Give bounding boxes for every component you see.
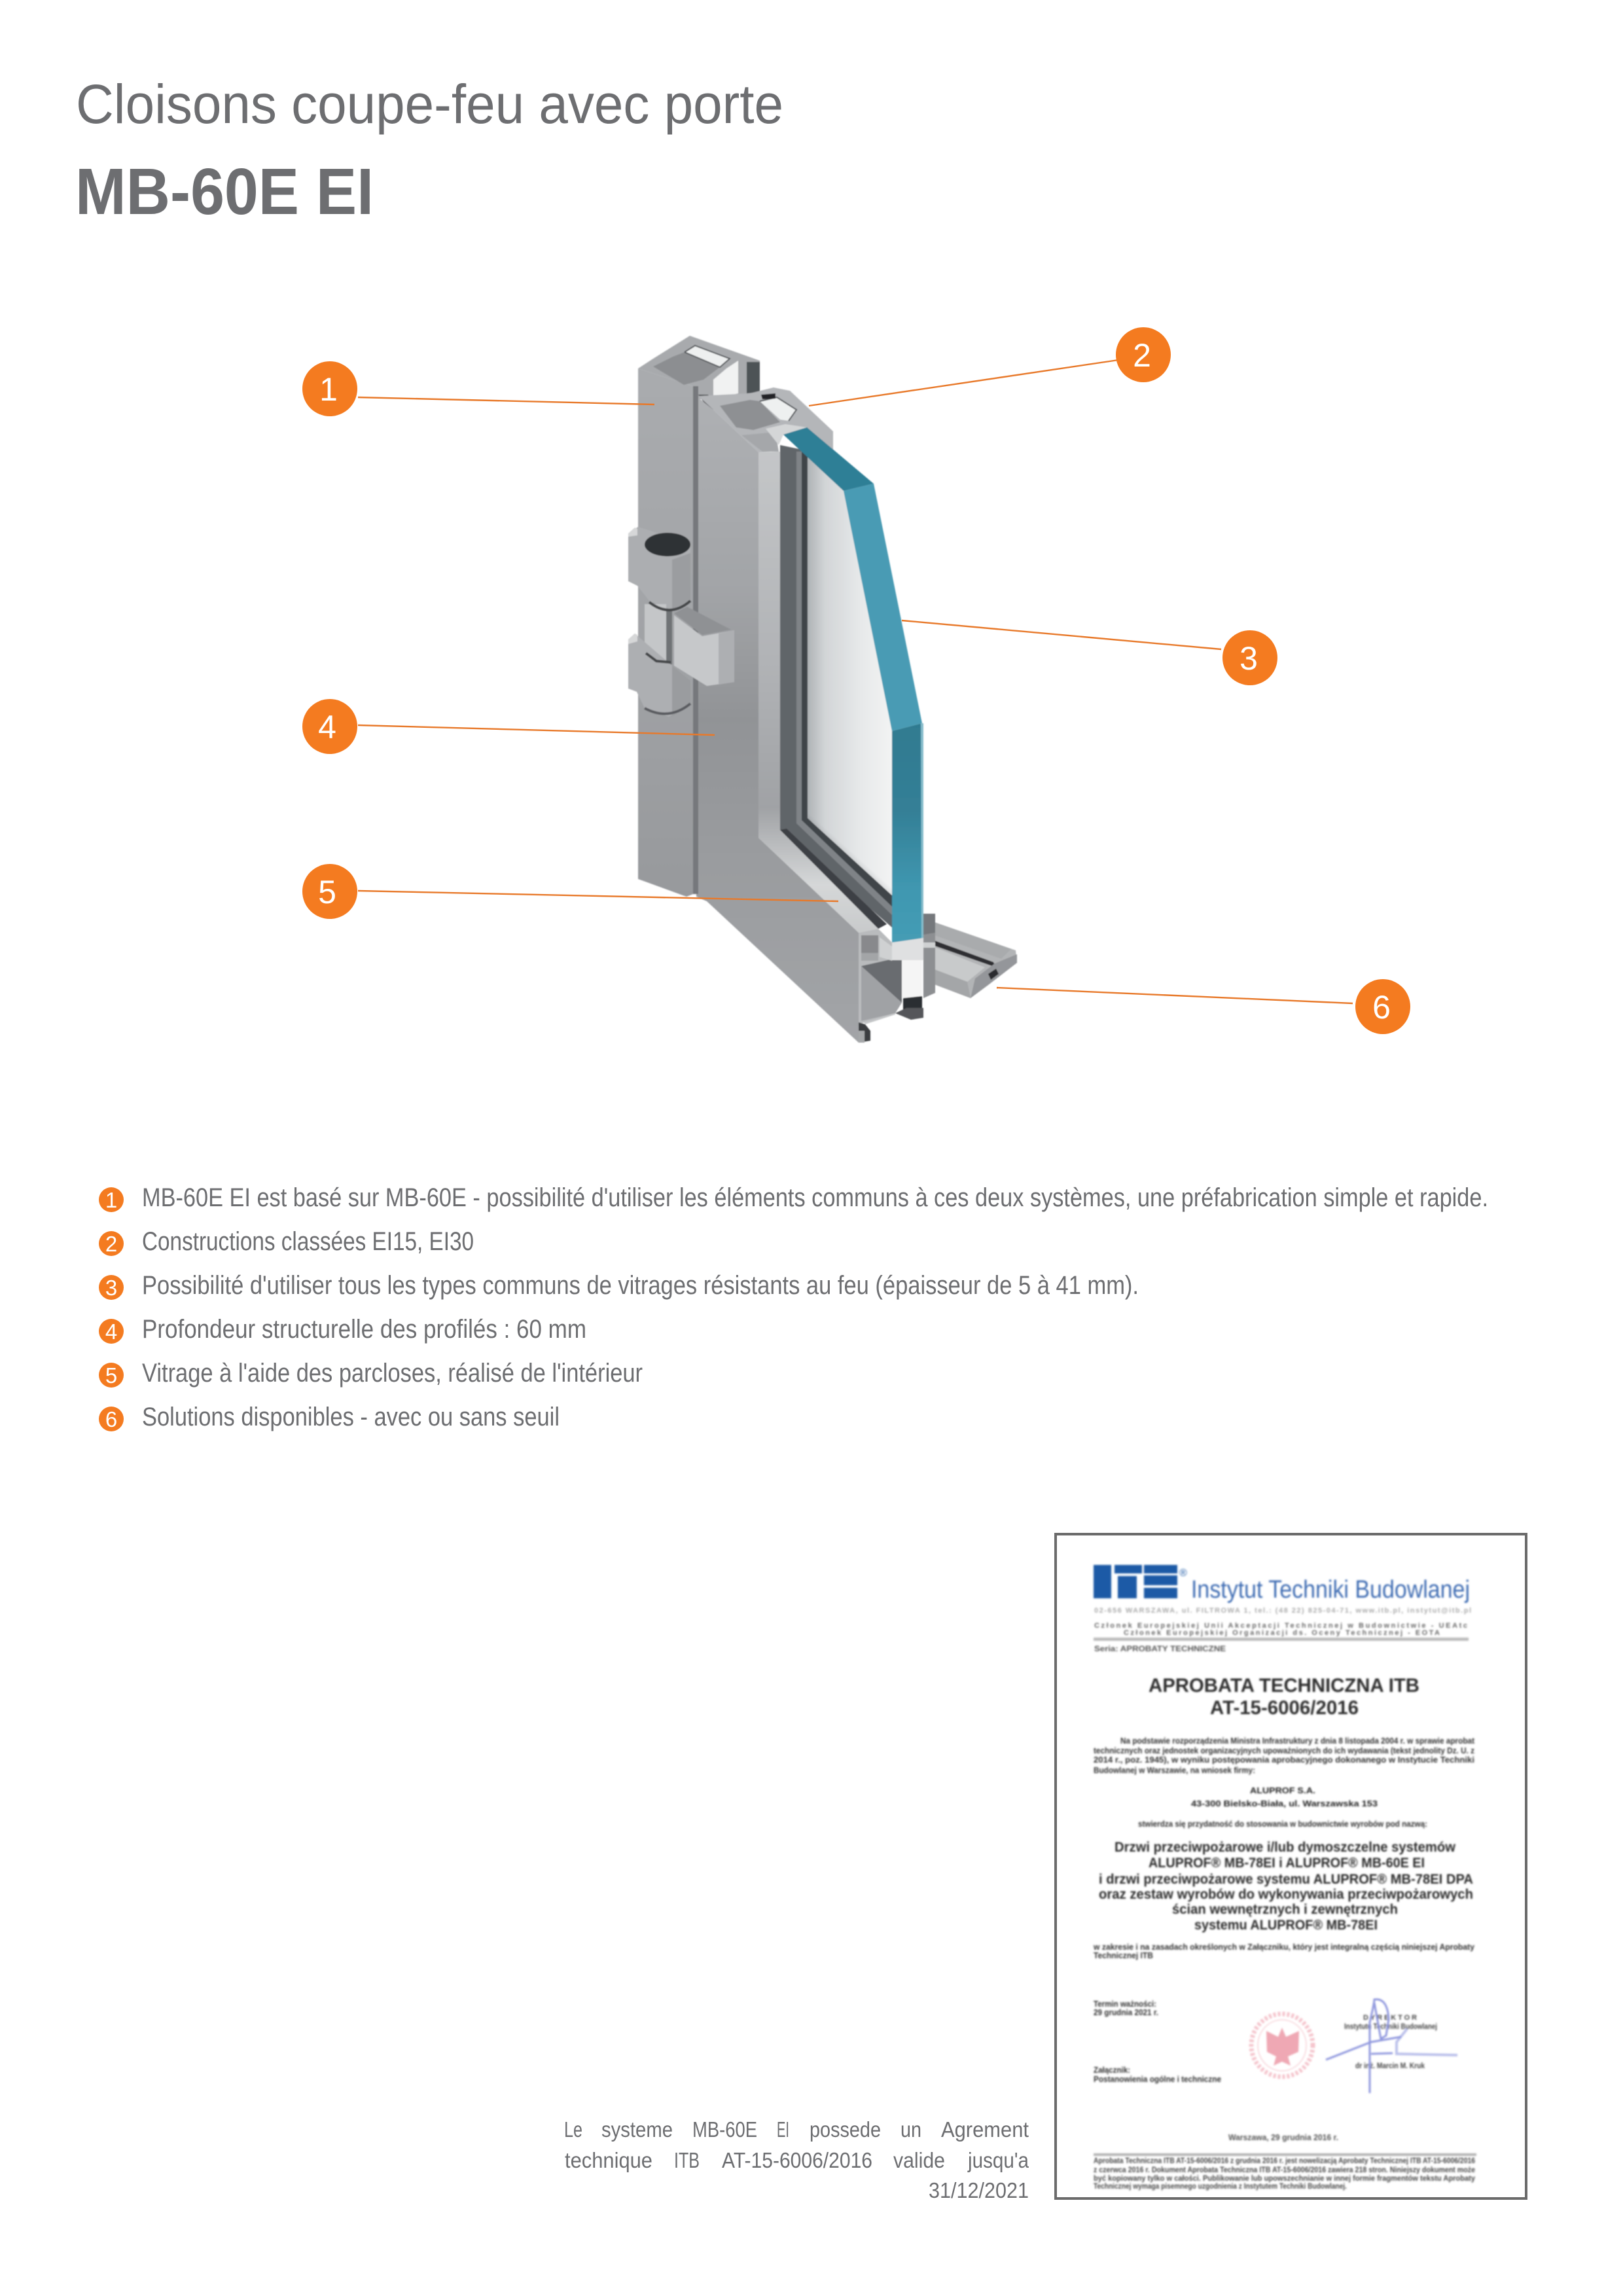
item 5: Vitrage à l'aide des parcloses, réalisé de l'intérieur <box>142 1359 643 1388</box>
validity and annex: Termin ważności: <box>1094 2000 1156 2009</box>
product designation: Drzwi przeciwpożarowe i/lub dymoszczelne systemów <box>1115 1840 1456 1855</box>
caption: technical approval note: jusqu'a <box>967 2148 1029 2172</box>
scope paragraph: Technicznej ITB <box>1094 1951 1153 1960</box>
validity and annex: 29 grudnia 2021 r. <box>1094 2008 1158 2017</box>
approval title <box>1149 1675 1419 1719</box>
jamb outer face <box>638 368 693 897</box>
validity and annex: Załącznik: <box>1094 2066 1130 2075</box>
hinge <box>628 527 734 717</box>
sill end section <box>859 914 935 1043</box>
product designation <box>1099 1840 1473 1933</box>
statement: stwierdza się przydatność do stosowania w budownictwie wyrobów pod nazwą: <box>1138 1820 1427 1829</box>
ITB logo: ® <box>1179 1568 1187 1579</box>
validity and annex <box>1094 2000 1221 2084</box>
callout 3 <box>1222 630 1277 685</box>
glass edge in teal <box>783 427 923 942</box>
item 1: 1 <box>105 1188 117 1212</box>
letterhead small print <box>1094 1607 1471 1637</box>
legal paragraph <box>1094 1736 1475 1775</box>
legal paragraph: Na podstawie rozporządzenia Ministra Infrastruktury z dnia 8 listopada 2004 r. w sprawie aprobat <box>1120 1736 1475 1746</box>
callout 4: 4 <box>318 709 336 745</box>
item 4: Profondeur structurelle des profilés : 60 mm <box>142 1315 586 1344</box>
legal paragraph: technicznych oraz jednostek organizacyjnych upoważnionych do ich wydawania (tekst jednolity Dz. U. z <box>1094 1746 1474 1755</box>
caption: technical approval note <box>564 2117 1029 2202</box>
door profile top section <box>698 387 833 459</box>
item 2: 2 <box>105 1232 117 1256</box>
item 3: Possibilité d'utiliser tous les types communs de vitrages résistants au feu (épaisseur de 5 à 41 mm). <box>142 1271 1139 1300</box>
approval title: AT-15-6006/2016 <box>1210 1697 1359 1719</box>
illustration: door frame profile <box>628 336 1017 1043</box>
callout 5 <box>302 864 357 919</box>
place and date: Warszawa, 29 grudnia 2016 r. <box>1228 2132 1338 2142</box>
item 3: 3 <box>105 1276 117 1300</box>
title: product name: MB-60E EI <box>75 155 374 228</box>
applicant: ALUPROF S.A. <box>1250 1785 1315 1795</box>
caption: technical approval note: EI <box>777 2117 789 2142</box>
product designation: ścian wewnętrznych i zewnętrznych <box>1172 1902 1398 1917</box>
director block: DYREKTOR <box>1363 2014 1417 2022</box>
product designation: systemu ALUPROF® MB-78EI <box>1194 1918 1378 1933</box>
legal paragraph: Budowlanej w Warszawie, na wniosek firmy: <box>1094 1766 1255 1775</box>
applicant <box>1191 1785 1378 1808</box>
validity and annex: Postanowienia ogólne i techniczne <box>1094 2075 1221 2084</box>
scope paragraph: w zakresie i na zasadach określonych w Załączniku, który jest integralną częścią niniejszej Aprobaty <box>1093 1943 1474 1952</box>
callout 2 <box>1116 327 1171 382</box>
leader lines <box>358 360 1353 1003</box>
red stamp <box>1251 2014 1313 2077</box>
callout 1 <box>302 361 357 416</box>
director block: dr inż. Marcin M. Kruk <box>1355 2061 1425 2070</box>
callout 1: 1 <box>319 371 338 408</box>
frame front face <box>696 396 859 1043</box>
certificate frame <box>1056 1534 1526 2198</box>
callout 5: 5 <box>318 874 336 910</box>
footer note: być kopiowany tylko w całości. Publikowanie lub upowszechnianie w innej formie fragmentów tekstu Aprobaty <box>1094 2175 1476 2183</box>
letterhead small print: 02-656 WARSZAWA, ul. FILTROWA 1, tel.: (48 22) 825-04-71, www.itb.pl, instytut@itb.pl <box>1094 1607 1471 1615</box>
product designation: i drzwi przeciwpożarowe systemu ALUPROF® MB-78EI DPA <box>1099 1872 1473 1887</box>
item 6: Solutions disponibles - avec ou sans seuil <box>142 1403 560 1431</box>
caption: technical approval note: 31/12/2021 <box>929 2178 1029 2202</box>
letterhead small print: Członek Europejskiej Unii Akceptacji Technicznej w Budownictwie - UEAtc <box>1094 1622 1467 1630</box>
letterhead small print: Członek Europejskiej Organizacji ds. Oceny Technicznej - EOTA <box>1124 1629 1440 1637</box>
title: product family: Cloisons coupe-feu avec porte <box>76 73 783 135</box>
glass pane <box>808 455 892 895</box>
caption: technical approval note: MB-60E <box>692 2117 757 2142</box>
caption: technical approval note: Le <box>564 2117 582 2142</box>
jamb top section <box>638 336 760 411</box>
dark glazing rebate <box>780 445 892 929</box>
footer note: z czerwca 2016 r. Dokument Aprobata Techniczna ITB AT-15-6006/2016 zawiera 218 stron. Niniejszy dokument może <box>1094 2166 1475 2174</box>
caption: technical approval note: un <box>901 2117 921 2142</box>
item 6: 6 <box>105 1407 117 1431</box>
item 2: Constructions classées EI15, EI30 <box>142 1227 474 1256</box>
item 4: 4 <box>105 1319 117 1344</box>
jamb divider strip <box>693 386 698 894</box>
signature <box>1326 2000 1457 2093</box>
callout 2: 2 <box>1133 337 1151 374</box>
feature list <box>99 1183 1488 1431</box>
callout 6 <box>1355 979 1410 1034</box>
certificate document <box>1093 1565 1476 2191</box>
director block: Instytutu Techniki Budowlanej <box>1344 2022 1437 2031</box>
product designation: ALUPROF® MB-78EI i ALUPROF® MB-60E EI <box>1149 1856 1425 1871</box>
caption: technical approval note: Agrement <box>941 2117 1029 2142</box>
footer note: Aprobata Techniczna ITB AT-15-6006/2016 z grudnia 2016 r. jest nowelizacją Aprobaty Technicznej ITB AT-15-6006/2016 <box>1094 2157 1475 2165</box>
light reveal band <box>758 452 878 933</box>
item 5: 5 <box>105 1363 117 1388</box>
threshold profile <box>933 922 1017 998</box>
caption: technical approval note: valide <box>893 2148 945 2172</box>
caption: technical approval note: technique <box>565 2148 652 2172</box>
series label: Seria: APROBATY TECHNICZNE <box>1094 1644 1226 1653</box>
footer note: Technicznej wymaga pisemnego uzgodnienia z Instytutem Techniki Budowlanej. <box>1094 2183 1347 2191</box>
callout 6: 6 <box>1372 989 1391 1026</box>
director block <box>1344 2014 1437 2070</box>
caption: technical approval note: possede <box>810 2117 881 2142</box>
callout 4 <box>302 699 357 754</box>
callout 3: 3 <box>1240 640 1258 677</box>
scope paragraph <box>1093 1943 1474 1960</box>
ITB logo <box>1094 1565 1187 1598</box>
product designation: oraz zestaw wyrobów do wykonywania przeciwpożarowych <box>1099 1887 1473 1902</box>
applicant: 43-300 Bielsko-Biała, ul. Warszawska 153 <box>1191 1799 1378 1808</box>
approval title: APROBATA TECHNICZNA ITB <box>1149 1675 1419 1696</box>
legal paragraph: 2014 r., poz. 1945), w wyniku postępowania aprobacyjnego dokonanego w Instytucie Techniki <box>1094 1755 1474 1765</box>
caption: technical approval note: systeme <box>601 2117 673 2142</box>
caption: technical approval note: AT-15-6006/2016 <box>722 2148 872 2172</box>
footer note <box>1094 2153 1476 2191</box>
ITB name: Instytut Techniki Budowlanej <box>1191 1576 1470 1604</box>
caption: technical approval note: ITB <box>674 2148 700 2172</box>
